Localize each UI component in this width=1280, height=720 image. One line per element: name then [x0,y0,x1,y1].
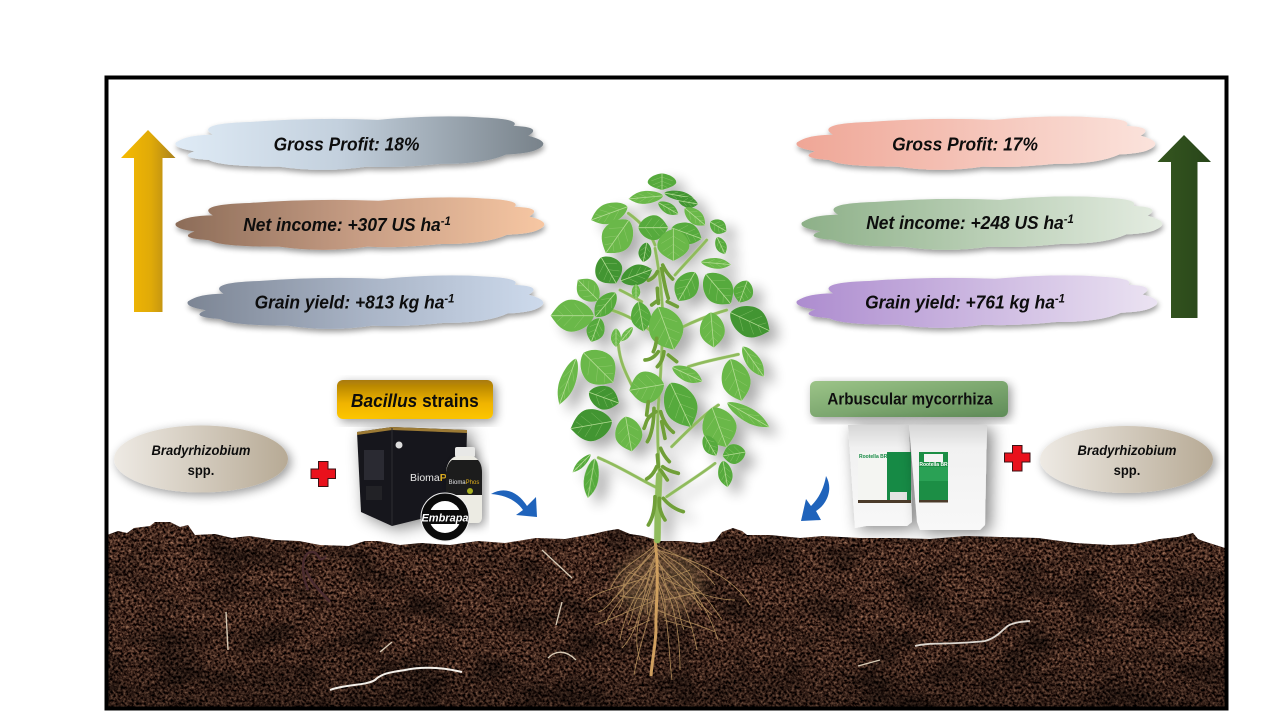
cloud: gross profit left [175,116,543,170]
leaflets [551,173,776,499]
label: Bacillus strains [337,380,493,419]
worm: white lower left [330,668,462,690]
box: BiomaPho [410,472,460,484]
stems [598,213,738,540]
seal: Embrapa: Embrapa [421,512,469,524]
worm: white lower right [915,621,1030,646]
cloud: net income right [801,196,1162,250]
cloud: net income left: -1 [441,215,451,228]
tap root and fine roots [588,540,750,680]
frame [106,78,1226,708]
cloud: gross profit right [796,116,1155,170]
oval: Bradyrhizobium right: Bradyrhizobium [1078,443,1176,458]
cloud: gross profit right: Gross Profit: 17% [892,134,1038,155]
curved arrow: blue right [801,476,829,521]
pods [644,265,683,525]
label: Bacillus strains: Bacillus strains [351,390,479,411]
oval: Bradyrhizobium left: Bradyrhizobium [152,443,250,458]
bottle: BiomaPhos [449,480,479,486]
cloud: grain yield left [187,275,543,329]
soil debris strands [226,550,880,666]
oval: Bradyrhizobium left: spp. [188,463,214,478]
cloud: net income right: Net income: +248 US ha [866,213,1064,233]
plus icon left [311,462,336,486]
soybean plant [551,173,776,540]
bag left: Rootella BR [859,454,888,460]
label: Arbuscular mycorrhiza: Arbuscular mycorrhiza [827,391,993,409]
cloud: gross profit left: Gross Profit: 18% [274,134,419,155]
plus icon right [1004,446,1030,471]
label: Arbuscular mycorrhiza [810,381,1008,417]
bag right: Rootella BR [919,462,948,468]
arrow: dark green upward [1158,135,1211,318]
soil layer [105,515,1230,710]
curved arrow: blue left [491,490,537,517]
oval: Bradyrhizobium right [1040,426,1213,493]
oval: Bradyrhizobium right: spp. [1114,463,1140,478]
worm: dark earthworm [303,552,330,602]
cloud: net income right: -1 [1064,213,1074,226]
cloud: grain yield right: -1 [1055,292,1065,306]
oval: Bradyrhizobium left [114,426,288,492]
cloud: net income left: Net income: +307 US ha [243,215,441,235]
cloud: grain yield right: Grain yield: +761 kg ha [865,292,1055,313]
product: mycorrhiza bags [848,425,987,530]
cloud: grain yield right [796,275,1157,328]
arrow: gold upward [121,130,176,312]
product: BiomaPhos box, bottle and seal [357,427,482,541]
cloud: net income left [175,197,544,250]
cloud: grain yield left: Grain yield: +813 kg ha [255,292,444,313]
cloud: grain yield left: -1 [444,292,454,306]
